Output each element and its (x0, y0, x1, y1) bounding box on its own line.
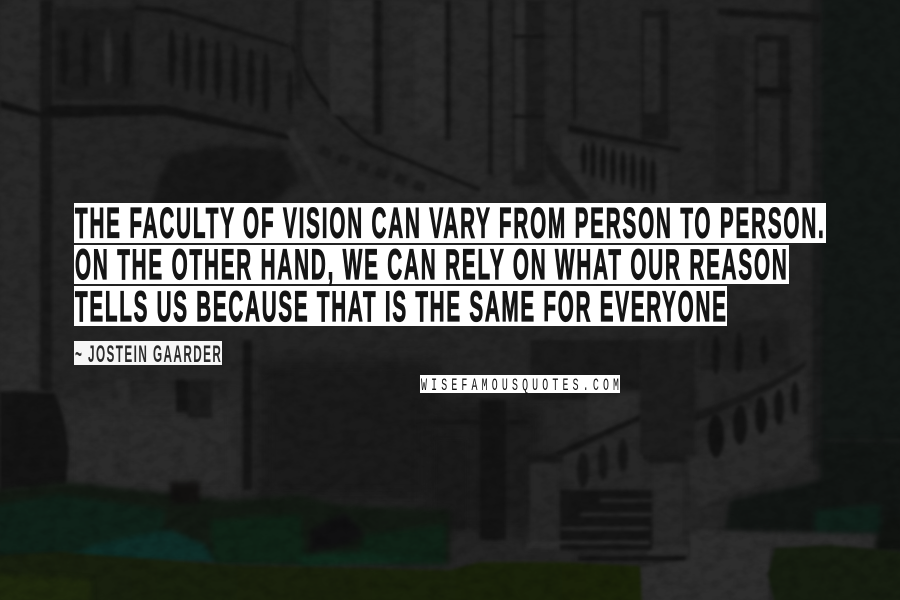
left balcony with balusters (0, 0, 295, 390)
author label: ~ JOSTEIN GAARDER (75, 342, 221, 368)
garden plants (0, 482, 450, 568)
pillars (526, 340, 695, 556)
stair steps (558, 490, 686, 561)
front hedge (0, 552, 642, 600)
main stair rail (290, 45, 480, 200)
quote line 3: TELLS US BECAUSE THAT IS THE SAME FOR EVERYONE (75, 283, 726, 331)
ground path (640, 530, 880, 600)
lower left wall details (0, 330, 252, 490)
right front hedge (768, 545, 900, 600)
dark tree area at right (812, 0, 900, 465)
left dark hedge (0, 392, 69, 490)
right bushes (725, 440, 900, 552)
quote line 1: THE FACULTY OF VISION CAN VARY FROM PERSON TO PERSON. (75, 199, 824, 248)
door and lower facade (430, 340, 655, 540)
spiral staircase (555, 320, 808, 510)
upper windows (295, 0, 820, 195)
watermark: WISEFAMOUSQUOTES.COM (421, 376, 619, 396)
front hedge highlight (0, 574, 90, 600)
balcony underside shadow (150, 145, 300, 205)
right balcony (545, 125, 680, 200)
quote line 2: ON THE OTHER HAND, WE CAN RELY ON WHAT OUR REASON (75, 241, 787, 289)
